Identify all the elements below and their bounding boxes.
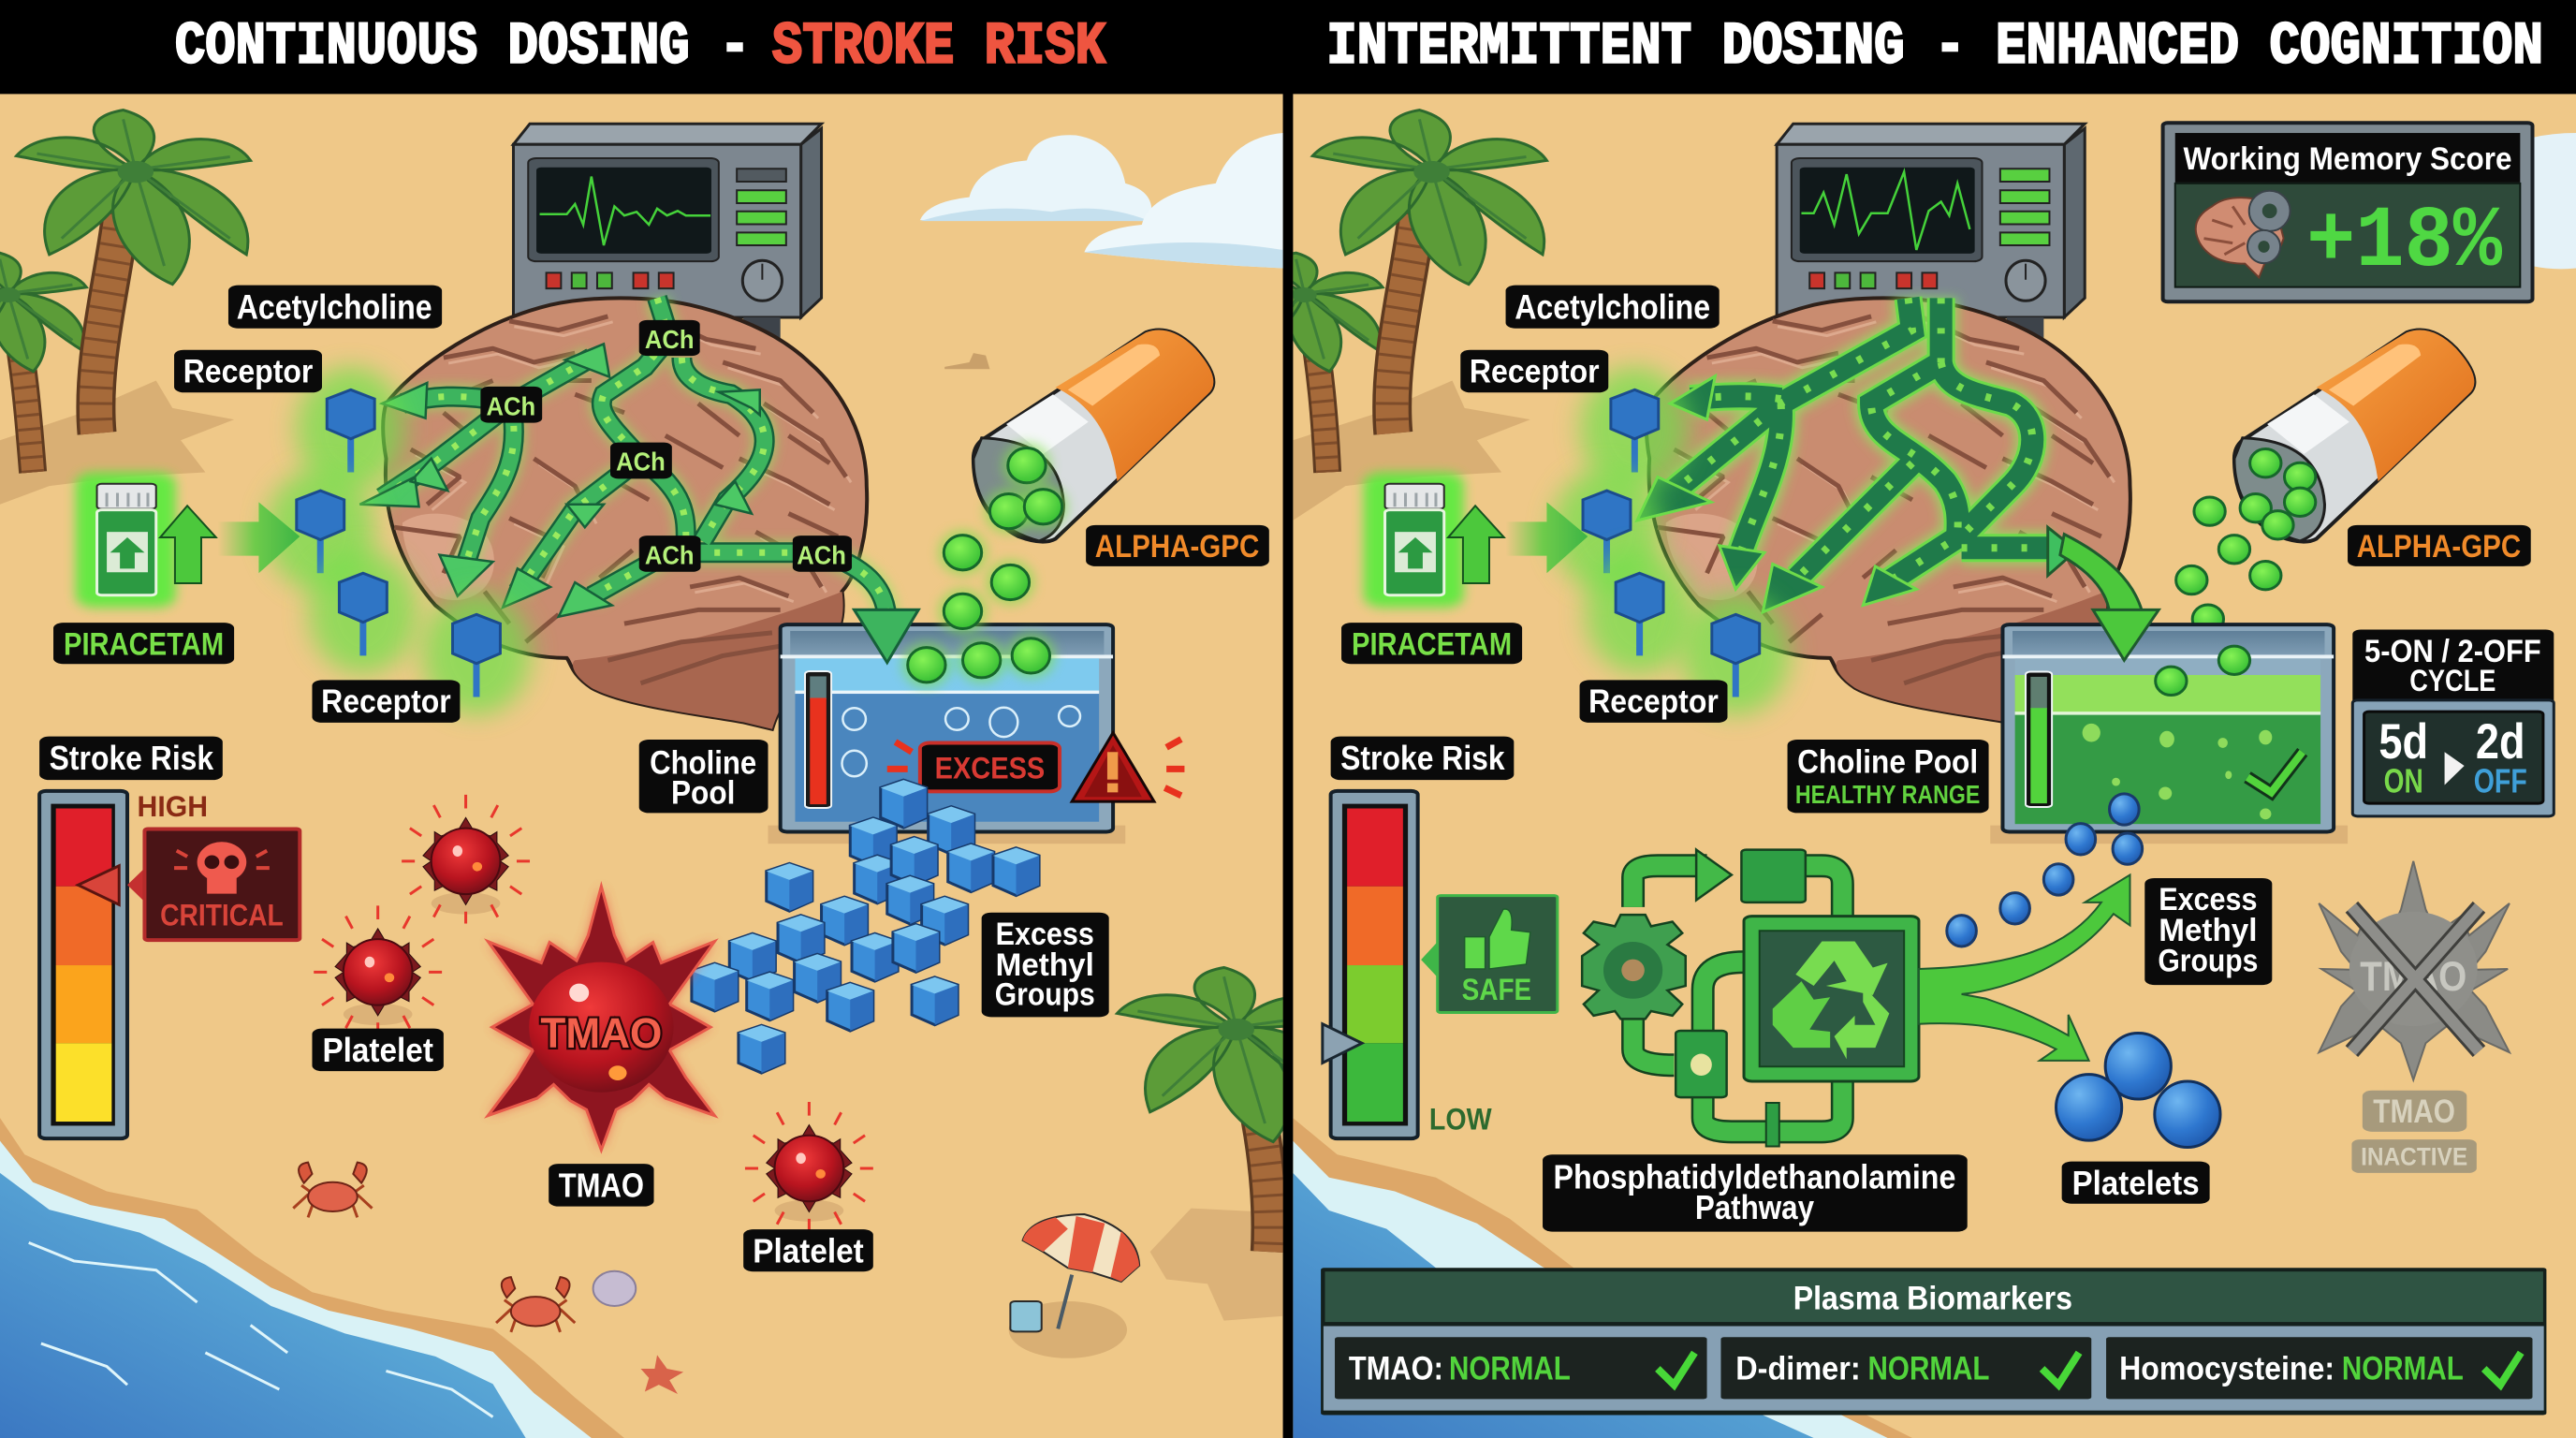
TMAO molecule: TMAO [540,1010,662,1057]
text: STROKE RISK [772,14,1105,81]
stroke risk label [1331,737,1514,780]
ACh label 4 [639,536,701,572]
stroke risk gauge low [1323,791,1418,1138]
receptors [1553,367,1790,715]
alpha-gpc label [2348,525,2531,566]
choline pool tank healthy [2002,624,2334,831]
platelet top [402,795,530,923]
palm tree bottom right [1114,966,1283,1253]
acetylcholine label [1506,286,1720,329]
working memory score panel [2163,123,2532,301]
platelet left [314,905,442,1034]
stroke risk label [39,737,223,780]
cycle timer panel [2352,700,2554,816]
critical panel: CRITICAL [160,898,284,932]
cycle timer panel: 5d [2378,714,2428,770]
ACh label 5: ACh [797,541,846,570]
receptor label bottom: Receptor [321,682,451,720]
stroke risk label: Stroke Risk [50,739,214,777]
choline pool label [1788,740,1989,813]
safe panel [1421,896,1558,1012]
choline pool label: Choline Pool [1797,743,1978,780]
receptor label top [174,350,322,392]
pathway label: Pathway [1695,1188,1814,1226]
TMAO label: TMAO [559,1167,644,1205]
seashell [593,1271,636,1306]
ocean and shoreline [1293,1118,1912,1438]
small palm tree [1223,253,1383,472]
inactive status label: INACTIVE [2361,1143,2467,1171]
excess methyl groups label: Methyl [996,946,1094,982]
ACh label 3 [610,443,672,478]
high label: HIGH [138,790,208,823]
monitor with ECG [513,124,822,340]
inactive status label [2351,1139,2477,1173]
brain [1647,298,2130,729]
stroke risk gauge high [39,791,127,1138]
D-dimer status cell [1720,1337,2091,1399]
arrow into tank [855,609,918,663]
starfish [640,1355,683,1394]
panel: continuous dosing beach scene [0,92,1352,1438]
piracetam label: PIRACETAM [64,625,224,662]
sand background right [1288,92,2576,1438]
receptor label top: Receptor [183,353,313,389]
panel: intermittent dosing beach scene: LOW [1429,1102,1492,1136]
TMAO label [549,1164,654,1207]
blue platelets [2056,1034,2220,1147]
inactive TMAO: TMAO [2360,953,2466,1000]
choline pool label: Pool [671,774,735,811]
piracetam label [53,623,234,664]
split output arrows [1919,875,2130,1061]
TMAO status cell [1335,1337,1707,1399]
ACh label 2: ACh [487,392,535,420]
critical panel [127,829,300,940]
excess methyl groups label: Groups [2158,942,2258,978]
cycle timer panel: ON [2384,762,2423,800]
blue methyl droplets [1947,794,2143,946]
choline pool tank [781,624,1113,831]
receptors [266,367,531,715]
piracetam label [1341,623,1522,664]
TMAO status cell: TMAO: [1349,1350,1443,1387]
acetylcholine arrow network [359,298,918,660]
big palm tree [17,110,251,433]
acetylcholine label: Acetylcholine [1515,287,1710,327]
platelet label 1: Platelet [322,1031,433,1069]
receptor label bottom [1580,680,1727,723]
alpha-gpc capsule [2234,330,2474,542]
platelets label [2062,1162,2210,1204]
cloud left [920,135,1151,221]
acetylcholine arrow network [1637,298,2143,612]
platelet bottom [745,1102,873,1231]
excess methyl groups label [982,913,1109,1017]
sand speck [944,353,989,369]
excess badge [920,742,1060,791]
alpha-gpc capsule [973,330,1213,542]
ACh label 4: ACh [645,541,695,570]
stroke risk label: Stroke Risk [1340,739,1505,777]
palm tree shadow [1293,381,1530,521]
title: continuous dosing: CONTINUOUS DOSING - [175,14,750,81]
biomarkers header [1325,1271,2543,1322]
D-dimer status cell: NORMAL [1868,1350,1989,1387]
D-dimer status cell: D-dimer: [1735,1350,1861,1387]
recycling box [1744,917,1919,1081]
homocysteine status cell: Homocysteine: [2119,1350,2334,1387]
crab 1 [293,1163,373,1217]
ocean and shoreline [0,1118,624,1438]
TMAO status cell: NORMAL [1449,1350,1571,1387]
excess methyl groups label: Excess [2159,881,2258,917]
panel: intermittent dosing beach scene: HEALTHY RANGE [1795,781,1980,809]
receptor label top: Receptor [1470,353,1600,389]
ACh label 5 [793,536,852,572]
phosphatidylethanolamine pipes [1633,850,1842,1146]
warning triangle [887,733,1184,801]
biomarkers frame [1323,1326,2545,1412]
excess badge: EXCESS [935,752,1045,785]
panel: intermittent dosing beach scene [1223,92,2576,1438]
platelet label 2: Platelet [753,1232,864,1270]
receptor label top [1460,350,1608,392]
piracetam bottle with arrows [1364,472,1588,608]
platelet label 1 [312,1029,444,1071]
gear [1582,915,1686,1019]
receptor label bottom [312,680,460,723]
receptor label bottom: Receptor [1588,682,1719,720]
acetylcholine label: Acetylcholine [237,287,432,327]
crab 2 [496,1277,575,1332]
piracetam label: PIRACETAM [1352,625,1512,662]
beach umbrella [1009,1214,1139,1358]
pathway label [1543,1154,1968,1232]
ACh label 3: ACh [616,448,666,477]
excess methyl group cubes [692,780,1039,1073]
inactive TMAO [2319,861,2510,1079]
biomarkers header: Plasma Biomarkers [1793,1280,2072,1316]
platelets label: Platelets [2072,1165,2200,1202]
safe panel: SAFE [1462,973,1531,1006]
inactive TMAO label [2363,1091,2466,1132]
brain [383,298,867,729]
alpha-gpc label: ALPHA-GPC [1095,528,1259,565]
platelet label 2 [743,1229,873,1271]
choline pool label [639,740,768,813]
acetylcholine label [228,286,442,329]
ACh label 1 [639,320,700,356]
choline pool label: Choline [650,744,756,781]
arrow into tank [2093,609,2159,660]
piracetam bottle with arrows [76,472,300,608]
cloud right edge [2532,133,2576,269]
excess methyl groups label [2144,878,2272,985]
ACh label 2 [480,387,542,423]
excess methyl groups label: Excess [996,916,1094,952]
green choline spheres [902,530,1056,688]
sand background left [0,92,1283,1438]
plasma biomarkers panel [1321,1268,2546,1416]
shadow: palm at right [1150,1209,1283,1321]
small palm tree [0,253,86,472]
TMAO molecule [488,887,714,1150]
choline tank shadow [768,826,1125,844]
big palm tree [1312,110,1546,433]
palm tree shadow [0,381,234,505]
excess methyl groups label: Groups [995,976,1095,1012]
alpha-gpc label [1086,525,1269,566]
cycle label [2352,629,2554,705]
cloud right [1084,133,1283,269]
homocysteine status cell [2106,1337,2532,1399]
pathway label: Phosphatidyldethanolamine [1553,1158,1955,1196]
inactive TMAO label: TMAO [2373,1093,2455,1130]
ACh label 1: ACh [645,326,695,354]
tank shadow [1990,826,2348,844]
green choline spheres [2176,449,2316,633]
spheres over tank [2156,646,2250,696]
excess methyl groups label: Methyl [2159,912,2258,948]
monitor with ECG [1777,124,2085,340]
